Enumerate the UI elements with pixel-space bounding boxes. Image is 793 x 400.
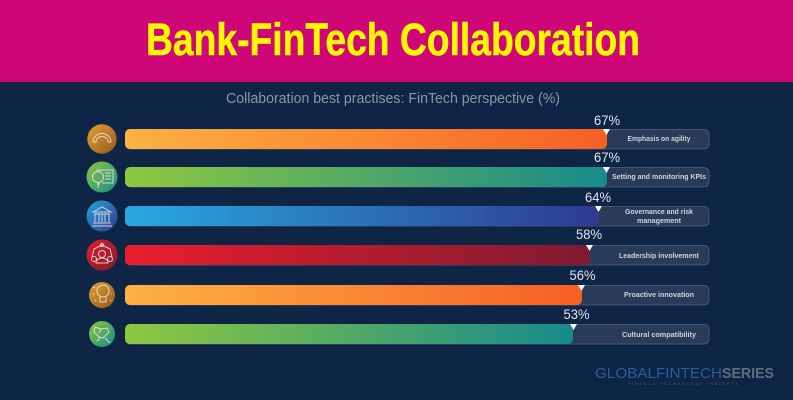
label: Proactive innovation <box>624 290 694 299</box>
value: 53% <box>564 306 590 322</box>
marker <box>603 129 610 135</box>
row: Governance and risk management <box>86 189 709 232</box>
row: Setting and monitoring KPIs <box>86 149 709 192</box>
label: Leadership involvement <box>619 251 699 260</box>
logo: Global FinTech Series: GLOBALFINTECH <box>595 366 722 382</box>
bar: 53% <box>125 324 573 344</box>
row: Cultural compatibility <box>89 306 709 347</box>
value: 67% <box>594 112 620 128</box>
icon: leadership network <box>86 240 118 270</box>
chart subtitle: Collaboration best practises: FinTech perspective (%) <box>226 91 560 107</box>
bar: 58% <box>125 245 590 265</box>
title banner <box>0 0 793 82</box>
value: 64% <box>585 189 611 205</box>
bar: 64% <box>125 206 599 226</box>
icon: KPI magnifier <box>86 162 118 192</box>
label: management <box>637 216 681 225</box>
value: 67% <box>594 149 620 165</box>
label: Cultural compatibility <box>622 330 697 339</box>
bar: 67% <box>125 129 607 149</box>
value: 58% <box>576 226 602 242</box>
logo: Global FinTech Series <box>595 366 774 386</box>
marker <box>595 206 602 212</box>
marker <box>603 167 610 173</box>
icon: bank building <box>86 200 118 232</box>
value: 56% <box>570 267 596 283</box>
title: Bank-FinTech Collaboration <box>146 14 640 65</box>
logo: Global FinTech Series: SERIES <box>722 366 774 382</box>
row: Emphasis on agility <box>87 112 709 154</box>
row: Proactive innovation <box>89 267 709 308</box>
bar: 56% <box>125 285 582 305</box>
label <box>625 207 694 225</box>
label: Setting and monitoring KPIs <box>612 172 706 181</box>
icon: handshake <box>89 321 115 347</box>
label: Emphasis on agility <box>628 134 691 143</box>
logo: Global FinTech Series: FINANCE TECHNOLOGY INSIGHTS <box>628 382 739 386</box>
row: Leadership involvement <box>86 226 709 270</box>
marker <box>570 324 577 330</box>
icon: agility arc <box>87 124 117 154</box>
marker <box>578 285 585 291</box>
label: Governance and risk <box>625 207 694 216</box>
icon: innovation bulb <box>89 282 115 308</box>
bar: 67% <box>125 167 607 187</box>
marker <box>586 245 593 251</box>
